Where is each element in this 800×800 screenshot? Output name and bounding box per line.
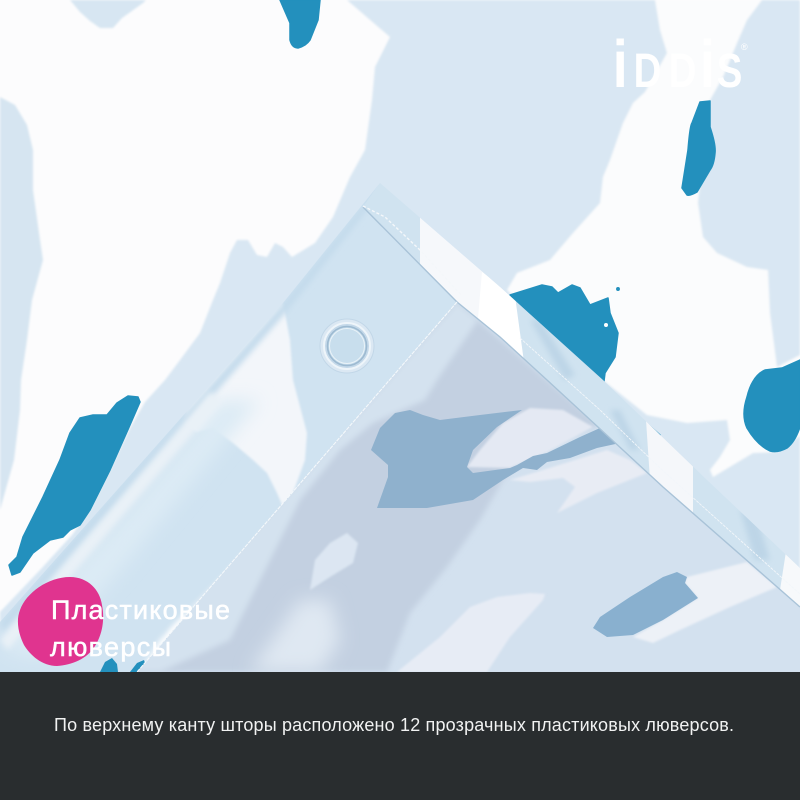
- icon: teal camouflage spots: [9, 0, 800, 575]
- logo: IDDIS: D: [669, 45, 697, 98]
- heading: люверсы: [50, 632, 171, 662]
- panel: hem strip along top edge: [350, 170, 800, 620]
- heading: [50, 595, 230, 662]
- logo: IDDIS: i: [700, 26, 715, 101]
- icon: pink blob behind heading: [18, 577, 103, 666]
- logo: IDDIS: i: [613, 26, 628, 101]
- white dot: [604, 323, 608, 327]
- panel: translucent single-layer fabric: [130, 290, 800, 680]
- heading: Пластиковые: [51, 595, 230, 625]
- logo: IDDIS: [613, 26, 748, 101]
- logo: IDDIS: D: [634, 45, 661, 98]
- darker camouflage spot, centre: [371, 410, 620, 508]
- panel: folded front hem layer: [0, 183, 457, 672]
- darker camouflage spot, lower right: [593, 572, 698, 637]
- hem edge shadow and stitching: [137, 206, 800, 672]
- icon: plastic grommet: [320, 319, 374, 373]
- panel: dark caption bar: [0, 672, 800, 800]
- logo: IDDIS: ®: [741, 42, 748, 52]
- logo: IDDIS: S: [717, 45, 742, 98]
- caption text: По верхнему канту шторы расположено 12 прозрачных пластиковых люверсов.: [54, 715, 734, 735]
